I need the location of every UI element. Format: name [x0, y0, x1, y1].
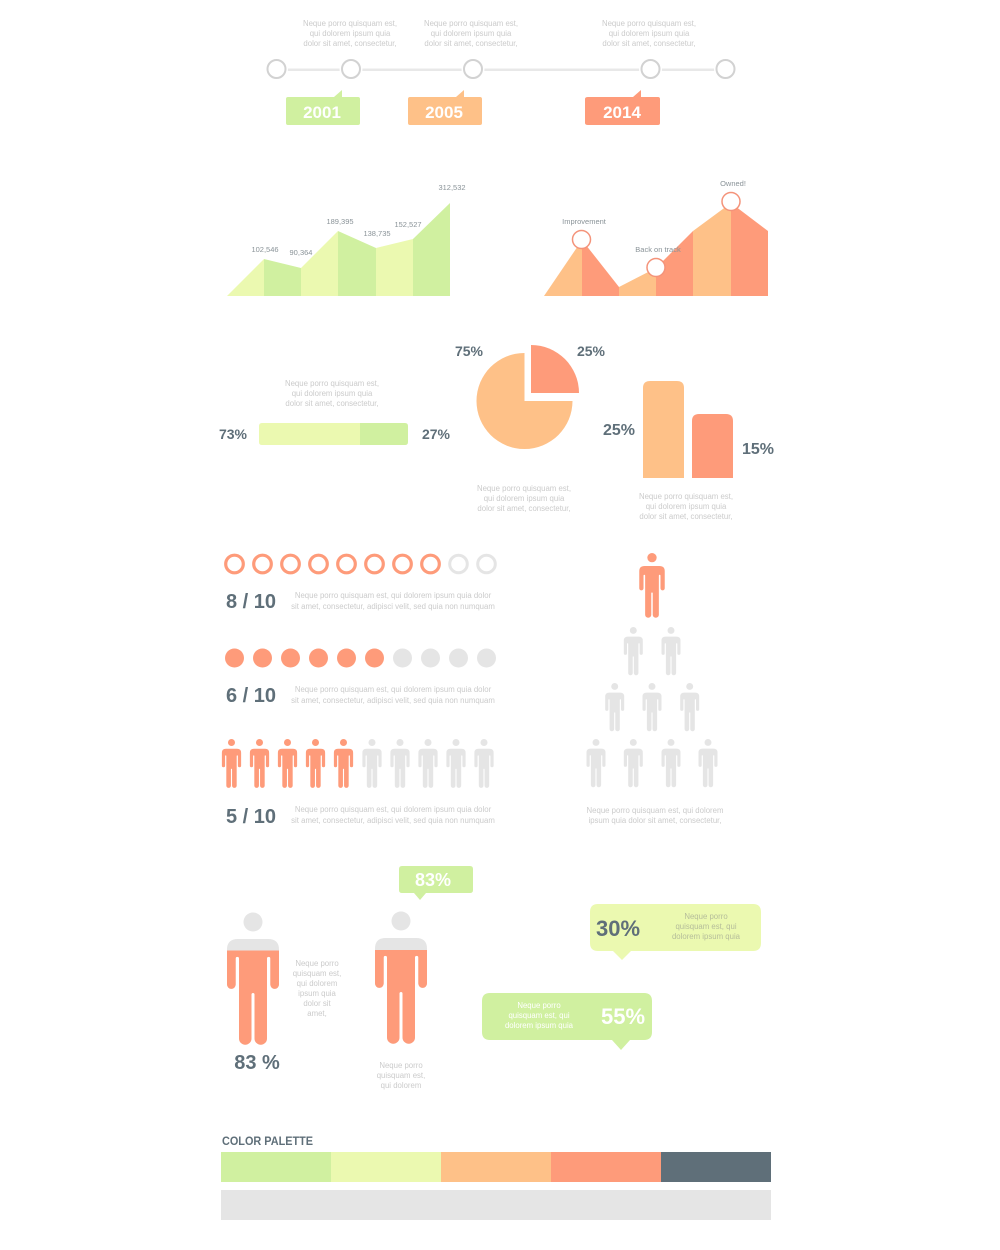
- pie text: qui dolorem ipsum quia: [484, 494, 565, 503]
- callout 55% text: dolorem ipsum quia: [505, 1021, 574, 1030]
- person gauge left: [227, 912, 341, 1074]
- callout 30% text: Neque porro: [684, 912, 728, 921]
- milestone markers: [572, 192, 740, 276]
- timeline text 2001: Neque porro quisquam est,: [303, 19, 397, 28]
- palette swatches: [221, 1152, 771, 1182]
- timeline text 2014: Neque porro quisquam est,: [602, 19, 696, 28]
- callout 83%: 83%: [415, 870, 451, 890]
- callout 55%: 55%: [601, 1004, 645, 1029]
- neutral swatch: [221, 1190, 771, 1220]
- gauge text: quisquam est,: [293, 969, 341, 978]
- gauge text: amet,: [307, 1009, 327, 1018]
- area chart values: 138,735: [363, 229, 391, 238]
- gauge text: dolor sit: [303, 999, 331, 1008]
- gauge text: quisquam est,: [377, 1071, 425, 1080]
- timeline text 2014: dolor sit amet, consectetur,: [602, 39, 696, 48]
- progress values: 27%: [422, 426, 451, 442]
- bar text: Neque porro quisquam est,: [639, 492, 733, 501]
- timeline text 2005: dolor sit amet, consectetur,: [424, 39, 518, 48]
- text 8/10: Neque porro quisquam est, qui dolorem ipsum quia dolor: [295, 591, 492, 600]
- pie text: [477, 484, 571, 513]
- callout 55% text: quisquam est, qui: [508, 1011, 570, 1020]
- callout 55% text: Neque porro: [517, 1001, 561, 1010]
- pie chart: [455, 343, 606, 513]
- gauge text: Neque porro: [379, 1061, 423, 1070]
- progress bar panel: [219, 379, 451, 445]
- pyramid text: ipsum quia dolor sit amet, consectetur,: [588, 816, 722, 825]
- bar text: qui dolorem ipsum quia: [646, 502, 727, 511]
- pie values: 25%: [577, 343, 606, 359]
- callout 55%: [482, 993, 652, 1050]
- text 5/10: [291, 805, 495, 825]
- milestone labels: Back on track: [635, 245, 681, 254]
- area chart values: 189,395: [326, 217, 354, 226]
- timeline text 2014: [602, 19, 696, 48]
- timeline text 2014: qui dolorem ipsum quia: [609, 29, 690, 38]
- grey figures: [587, 627, 717, 787]
- gauge value: 83 %: [234, 1052, 280, 1074]
- bar text: dolor sit amet, consectetur,: [639, 512, 733, 521]
- area chart: orange milestones: [544, 179, 768, 296]
- area chart values: 90,364: [290, 248, 312, 257]
- callout 30%: [590, 904, 761, 960]
- leader figure: [639, 553, 665, 618]
- gauge text: ipsum quia: [298, 989, 337, 998]
- tag 2005: 2005: [425, 103, 463, 122]
- callout 30% text: dolorem ipsum quia: [672, 932, 741, 941]
- area chart values: [251, 183, 466, 257]
- timeline text 2001: dolor sit amet, consectetur,: [303, 39, 397, 48]
- bar values: [603, 422, 774, 458]
- callout 30% text: [672, 912, 741, 941]
- callout 83%: [399, 866, 473, 900]
- tag 2001: 2001: [303, 103, 341, 122]
- progress text: dolor sit amet, consectetur,: [285, 399, 379, 408]
- bar text: [639, 492, 733, 521]
- area chart values: 102,546: [251, 245, 279, 254]
- bar values: 25%: [603, 422, 635, 439]
- text 8/10: [291, 591, 495, 611]
- people pyramid: [587, 553, 723, 825]
- score 6/10: 6 / 10: [226, 685, 276, 707]
- pie values: [455, 343, 606, 359]
- timeline nodes: [265, 58, 737, 80]
- text 6/10: Neque porro quisquam est, qui dolorem ipsum quia dolor: [295, 685, 492, 694]
- bar values: 15%: [742, 441, 774, 458]
- pie text: dolor sit amet, consectetur,: [477, 504, 571, 513]
- timeline text 2005: [424, 19, 518, 48]
- pie text: Neque porro quisquam est,: [477, 484, 571, 493]
- timeline text 2001: qui dolorem ipsum quia: [310, 29, 391, 38]
- timeline: [265, 19, 737, 125]
- text 5/10: sit amet, consectetur, adipisci velit, sed quia non numquam: [291, 816, 495, 825]
- gauge text: qui dolorem: [297, 979, 337, 988]
- progress values: [219, 426, 451, 442]
- pyramid text: [587, 806, 723, 825]
- palette heading: COLOR PALETTE: [222, 1134, 313, 1148]
- rating: 5 of 10 people: [222, 739, 495, 828]
- area chart values: 152,527: [394, 220, 422, 229]
- pyramid text: Neque porro quisquam est, qui dolorem: [587, 806, 723, 815]
- text 5/10: Neque porro quisquam est, qui dolorem ipsum quia dolor: [295, 805, 492, 814]
- tag 2014: [585, 90, 660, 125]
- progress values: 73%: [219, 426, 248, 442]
- callout 30%: 30%: [596, 916, 640, 941]
- text 6/10: sit amet, consectetur, adipisci velit, sed quia non numquam: [291, 696, 495, 705]
- text 8/10: sit amet, consectetur, adipisci velit, sed quia non numquam: [291, 602, 495, 611]
- rating: 6 of 10 dots: [225, 648, 496, 707]
- milestone labels: Improvement: [562, 217, 607, 226]
- progress text: qui dolorem ipsum quia: [292, 389, 373, 398]
- tag 2014: 2014: [603, 103, 641, 122]
- gauge text: Neque porro: [295, 959, 339, 968]
- callout 30% text: quisquam est, qui: [675, 922, 737, 931]
- timeline track: [277, 68, 726, 71]
- progress text: [285, 379, 379, 408]
- text 6/10: [291, 685, 495, 705]
- rating: 8 of 10 rings: [226, 555, 495, 613]
- tag 2001: [286, 90, 360, 125]
- progress bar: [259, 423, 408, 445]
- timeline text 2001: [303, 19, 397, 48]
- gauge text: qui dolorem: [381, 1081, 421, 1090]
- milestone labels: [562, 179, 746, 254]
- timeline text 2005: Neque porro quisquam est,: [424, 19, 518, 28]
- milestone labels: Owned!: [720, 179, 746, 188]
- pie values: 75%: [455, 343, 484, 359]
- gauge text: [293, 959, 341, 1018]
- bar chart: [603, 381, 774, 521]
- colour palette: [221, 1134, 771, 1220]
- tag 2005: [408, 90, 482, 125]
- timeline text 2005: qui dolorem ipsum quia: [431, 29, 512, 38]
- callout 55% text: [505, 1001, 574, 1030]
- score 8/10: 8 / 10: [226, 591, 276, 613]
- score 5/10: 5 / 10: [226, 806, 276, 828]
- person gauge right: [375, 866, 473, 1090]
- progress text: Neque porro quisquam est,: [285, 379, 379, 388]
- area chart values: 312,532: [438, 183, 466, 192]
- area chart: green: [227, 183, 466, 296]
- gauge text: [377, 1061, 425, 1090]
